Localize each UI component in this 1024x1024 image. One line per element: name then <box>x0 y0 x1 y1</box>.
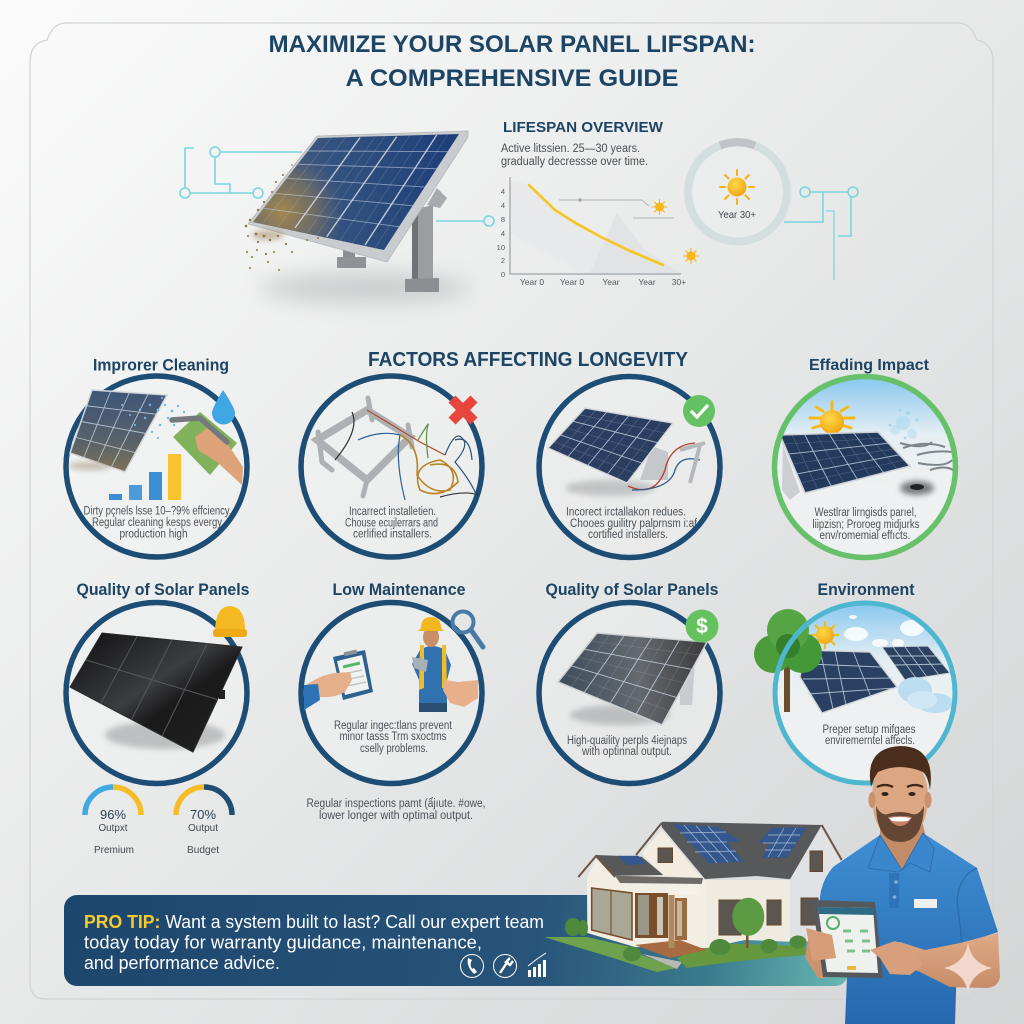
solar panel <box>558 633 707 725</box>
note under low maintenance <box>306 798 486 822</box>
polo shirt <box>815 833 998 1024</box>
caption <box>567 735 687 758</box>
right circuit connectors <box>784 187 858 280</box>
mounting frame <box>317 398 412 496</box>
panel: environment: Environment <box>818 581 915 599</box>
panel: improper cleaning <box>66 356 247 557</box>
upper left gable <box>642 830 702 878</box>
lifespan chart <box>497 177 699 287</box>
tablet <box>812 900 883 978</box>
tangled wires <box>335 410 478 500</box>
left arm <box>805 930 838 978</box>
panel: improper cleaning: Improrer Cleaning <box>93 356 229 374</box>
solar panel <box>780 432 910 500</box>
hair <box>870 746 931 790</box>
house <box>544 822 842 972</box>
hand cleaning with cloth <box>172 412 243 485</box>
icon: dollar badge <box>686 610 718 642</box>
collar <box>868 833 934 872</box>
icon: hard hat <box>213 606 247 637</box>
panel: quality of solar panels: Quality of Solar Panels <box>76 581 250 599</box>
lifespan chart: 2 <box>501 256 505 265</box>
lifespan chart: Year 0 <box>560 277 584 287</box>
panel surface <box>248 131 468 262</box>
ring <box>775 603 955 783</box>
caption: env/romemial effıcts. <box>820 530 910 542</box>
caption: Regular ingec:tlans prevent <box>334 720 453 732</box>
icon: sun <box>810 402 854 434</box>
sparkle watermark <box>944 943 992 993</box>
pro tip text: PRO TIP: Want a system built to last? Call our expert team <box>84 912 544 932</box>
panel: quality of solar panels 2 <box>539 581 720 784</box>
small sun <box>652 199 668 215</box>
title <box>268 31 756 92</box>
wind gusts <box>900 442 953 470</box>
year 30+ ring: Year 30+ <box>718 209 756 221</box>
pro tip text: and performance advice. <box>84 953 280 973</box>
icon: green check <box>683 395 715 427</box>
icon: magnifier <box>452 612 483 647</box>
right lawn <box>677 943 806 968</box>
lifespan chart: Year <box>638 277 656 287</box>
section heading: FACTORS AFFECTING LONGEVITY <box>368 348 688 371</box>
sky <box>808 606 946 662</box>
house windows <box>658 848 822 935</box>
caption <box>822 724 916 747</box>
caption <box>84 506 232 540</box>
pro tip banner <box>64 895 848 986</box>
panel: correct installation <box>539 376 720 558</box>
hand with tool <box>443 680 478 707</box>
panel: low maintenance <box>301 581 483 784</box>
gauge: budget: Budget <box>187 844 219 856</box>
caption: production high <box>120 528 188 540</box>
caption: Westlrar lirngisds parıel, <box>814 507 916 519</box>
caption: Dirty pçnels lsse 10–?9% effciency. <box>84 506 232 518</box>
panel: quality of solar panels <box>66 581 250 784</box>
wing gable <box>587 858 615 878</box>
lifespan chart: 30+ <box>672 277 686 287</box>
dust particles <box>245 164 319 271</box>
mouth <box>888 816 912 826</box>
icon: water drop <box>212 390 235 424</box>
bar chart <box>109 454 181 500</box>
left circuit connectors <box>180 147 494 226</box>
caption: Preper setup mifgaes <box>822 724 916 736</box>
snow particles <box>889 408 919 440</box>
caption: minor tasss Trm sxoctms <box>340 731 447 743</box>
lifespan chart: Year 0 <box>520 277 544 287</box>
lifespan chart: 4 <box>501 201 505 210</box>
lifespan chart: 4 <box>501 229 505 238</box>
title: MAXIMIZE YOUR SOLAR PANEL LIFSPAN: <box>268 31 756 58</box>
porch fascia <box>668 885 700 895</box>
head <box>868 746 932 842</box>
icon: red x <box>452 399 474 421</box>
title: A COMPREHENSIVE GUIDE <box>346 65 678 92</box>
ring <box>774 376 956 558</box>
lifespan overview text: gradually decressse over time. <box>501 156 648 168</box>
pro tip text <box>84 912 544 973</box>
gauge: premium: Outpxt <box>98 822 128 834</box>
worker <box>412 617 451 712</box>
icon: phone <box>460 954 484 978</box>
lifespan overview text: LIFESPAN OVERVIEW <box>503 119 664 136</box>
gauge: premium: Premium <box>94 844 134 856</box>
gauge: premium: 96% <box>100 807 126 822</box>
panel stand <box>337 188 447 292</box>
wing roof <box>596 855 663 876</box>
icon: wrench <box>494 954 516 978</box>
roof solar panels <box>617 824 807 865</box>
dirty panel <box>68 390 185 472</box>
beard <box>876 806 924 842</box>
caption: Chooes guilitry palprnsm i:af <box>570 518 698 530</box>
lifespan chart: Year <box>602 277 620 287</box>
dark stain <box>900 481 934 495</box>
pointing hand <box>870 941 922 975</box>
wing wall <box>587 877 707 948</box>
left lawn <box>544 937 677 972</box>
lifespan chart: 0 <box>501 270 505 279</box>
eyes <box>877 785 923 787</box>
icon: dollar badge: $ <box>696 615 708 638</box>
main wall <box>707 880 790 948</box>
panel: effading impact <box>770 357 960 558</box>
panel: incorrect installation <box>301 376 482 557</box>
right gable wall <box>788 828 842 942</box>
forearm <box>870 933 1000 988</box>
panel: environment <box>754 581 960 783</box>
year 30+ ring <box>688 142 787 242</box>
deck <box>635 940 707 958</box>
ground shadow <box>260 272 470 304</box>
caption: liipzisn; Proroeg midjurks <box>812 519 920 531</box>
lifespan chart: 4 <box>501 187 505 196</box>
main roof <box>662 822 822 879</box>
caption: cortified installers. <box>588 529 668 541</box>
caption: Incarrect installetien. <box>349 506 436 518</box>
icon: growth chart <box>528 953 546 977</box>
caption: High-quaility perpls 4iejnaps <box>567 735 687 747</box>
hero solar panel <box>245 131 470 304</box>
panel: quality of solar panels 2: Quality of Solar Panels <box>546 581 718 599</box>
caption <box>566 506 698 541</box>
porch post <box>668 895 674 948</box>
caption: Regular cleaning kesps evergy <box>92 517 222 529</box>
sleeve seam <box>957 868 977 943</box>
gauge: budget <box>176 787 232 856</box>
note under low maintenance: Regular inspections pamt (ẩjıute. #owe, <box>306 798 486 810</box>
finger grip <box>806 928 836 961</box>
clipboard and hand <box>304 650 373 710</box>
walkway <box>642 954 682 969</box>
bushes <box>565 918 806 962</box>
technician <box>805 746 1000 1024</box>
lifespan overview text: Active litssien. 25—30 years. <box>501 143 640 155</box>
sun <box>811 621 839 649</box>
panel: low maintenance: Low Maintenance <box>332 581 466 599</box>
porch doors <box>635 893 687 940</box>
caption <box>345 506 438 540</box>
caption: cselly problems. <box>360 743 428 755</box>
pro tip text: today today for warranty guidance, maintenance, <box>84 932 482 952</box>
caption: cerlified installers. <box>353 528 432 540</box>
caption <box>334 720 453 755</box>
note under low maintenance: lower longer with optimal output. <box>319 810 473 822</box>
caption: with optinnal output. <box>581 746 672 758</box>
caption: enviremerntel affecls. <box>825 735 915 747</box>
gauge: budget: 70% <box>190 807 216 822</box>
placket <box>889 873 899 908</box>
front solar panel <box>800 650 897 713</box>
dust clouds <box>898 677 953 713</box>
clouds <box>844 615 924 647</box>
front tree <box>732 898 764 948</box>
panel: effading impact: Effading Impact <box>809 357 930 374</box>
neck <box>880 820 926 870</box>
solar panel <box>548 408 673 483</box>
caption: Chouse ecujlerrars and <box>345 518 438 530</box>
lifespan chart: 8 <box>501 215 505 224</box>
lifespan overview text <box>501 119 664 168</box>
lifespan chart: 10 <box>497 243 505 252</box>
large porch window <box>592 888 632 940</box>
sun icon <box>720 170 754 204</box>
porch awning <box>615 876 703 884</box>
tree <box>754 609 822 712</box>
gauge: budget: Output <box>188 822 218 834</box>
black solar panel <box>70 633 242 752</box>
wiring <box>628 443 705 490</box>
small sun <box>683 248 699 264</box>
gauge: premium <box>85 787 141 856</box>
name badge <box>914 899 937 908</box>
sky <box>784 379 946 436</box>
back solar panel <box>882 646 950 680</box>
caption: Incorect irctallakon redues. <box>566 506 686 518</box>
caption <box>812 507 920 542</box>
